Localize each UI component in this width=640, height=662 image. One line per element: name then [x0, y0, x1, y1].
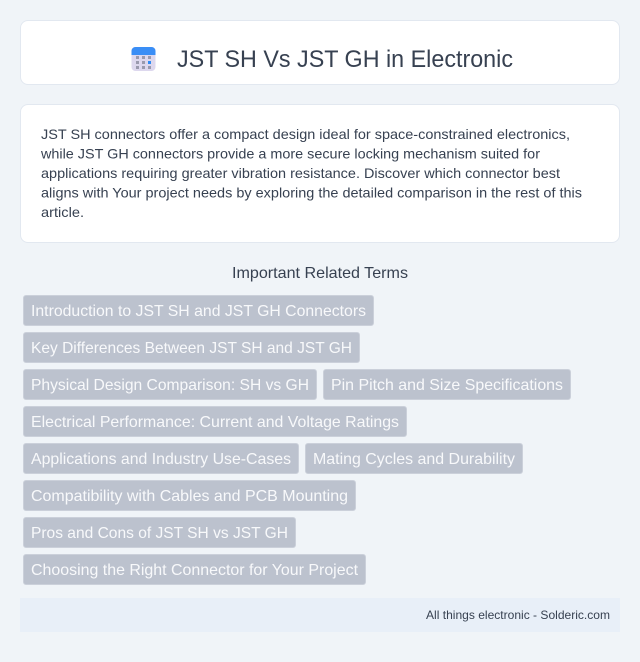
icon: calendar — [132, 47, 156, 71]
tag: mating cycles — [305, 443, 523, 474]
heading: JST SH Vs JST GH in Electronic — [177, 46, 513, 73]
tag: pros and cons: Pros and Cons of JST SH vs JST GH — [31, 525, 288, 542]
tag: physical design — [23, 369, 317, 400]
tag: physical design: Physical Design Comparison: SH vs GH — [31, 377, 309, 394]
footer: All things electronic - Solderic.com — [426, 608, 610, 622]
tag: applications — [23, 443, 299, 474]
tag: applications: Applications and Industry Use-Cases — [31, 451, 291, 468]
tag: compatibility: Compatibility with Cables and PCB Mounting — [31, 488, 348, 505]
tag: introduction — [23, 295, 374, 326]
intro text card — [20, 104, 620, 243]
related terms heading: Important Related Terms — [232, 265, 408, 282]
intro text card: article. — [41, 204, 84, 220]
intro text card: aligns with Your project needs by exploring the detailed comparison in the rest of this — [41, 184, 582, 200]
tag: pros and cons — [23, 517, 296, 548]
tag: mating cycles: Mating Cycles and Durability — [313, 451, 515, 468]
intro text card: while JST GH connectors provide a more secure locking mechanism suited for — [40, 146, 540, 162]
tag: introduction: Introduction to JST SH and JST GH Connectors — [31, 303, 366, 320]
tag: key differences — [23, 332, 360, 363]
title card — [20, 20, 620, 85]
tag: electrical performance — [23, 406, 407, 437]
footer — [20, 598, 620, 632]
tag: choosing — [23, 554, 366, 585]
tag: compatibility — [23, 480, 356, 511]
tag: electrical performance: Electrical Performance: Current and Voltage Ratings — [31, 414, 399, 431]
intro text card: JST SH connectors offer a compact design ideal for space-constrained electronics, — [41, 126, 570, 142]
tag: pin pitch: Pin Pitch and Size Specifications — [331, 377, 563, 394]
intro text card: applications requiring greater vibration resistance. Discover which connector best — [41, 165, 560, 181]
tag: pin pitch — [323, 369, 571, 400]
tag: key differences: Key Differences Between JST SH and JST GH — [31, 340, 352, 357]
tag: choosing: Choosing the Right Connector for Your Project — [31, 562, 359, 579]
